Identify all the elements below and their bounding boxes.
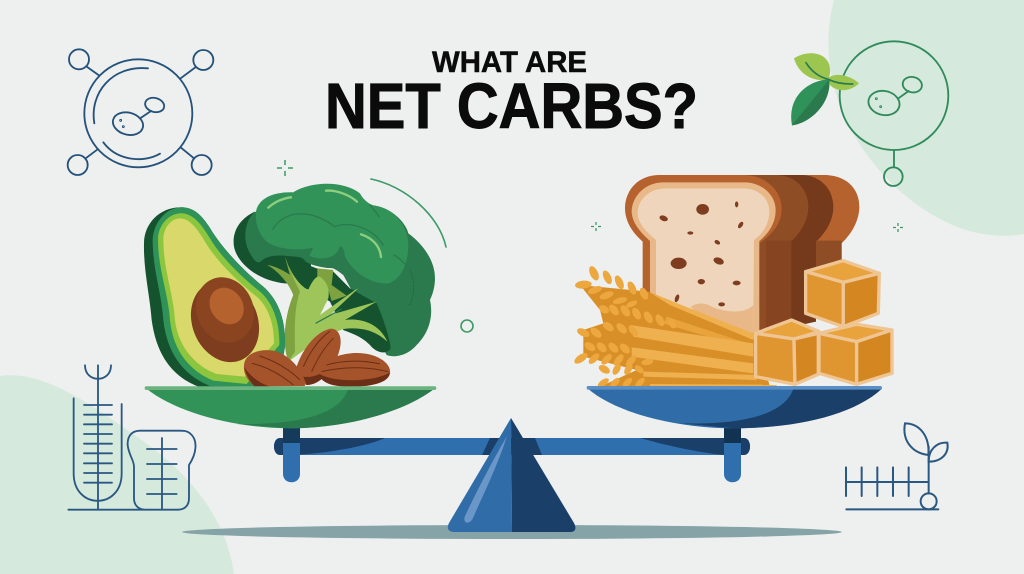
sparkle: near broccoli [277, 160, 293, 176]
wheat bundle [573, 265, 777, 389]
title [325, 46, 698, 142]
avocado [144, 207, 285, 387]
cube bottom right [819, 324, 892, 384]
balance scale [274, 418, 750, 532]
small green ring [461, 320, 473, 332]
right food group [573, 175, 892, 389]
wheat stalks [580, 285, 770, 387]
background blob: bottom left [0, 375, 234, 574]
icon: molecule circle top left [68, 49, 213, 175]
icon: molecule circle top right with stem [840, 41, 948, 186]
right hanger [724, 428, 741, 482]
cube bottom left [756, 320, 819, 384]
broccoli [234, 184, 435, 362]
green arc accent [371, 179, 446, 247]
icon: wheat measuring tube and bread outline bottom left [68, 365, 196, 510]
background blob: top right [828, 0, 1024, 236]
title: WHAT ARE [432, 46, 587, 79]
ground shadow [182, 525, 842, 539]
sugar cubes [756, 261, 892, 384]
cube top [806, 261, 879, 327]
icon: leaves [791, 53, 859, 125]
title: NET CARBS? [325, 70, 698, 142]
wheat grains [573, 265, 678, 389]
scale beam [274, 438, 750, 455]
almonds [244, 329, 390, 387]
fulcrum cone [448, 418, 575, 532]
bread loaf [625, 175, 859, 335]
left hanger [283, 428, 300, 482]
sparkle: right of bread [893, 223, 903, 232]
bread holes [659, 201, 744, 306]
sparkle: left of bread [591, 222, 601, 231]
blue pan [587, 386, 882, 428]
icon: sprout ruler bottom right [846, 423, 948, 509]
left food group [144, 184, 435, 387]
green pan [145, 386, 436, 428]
